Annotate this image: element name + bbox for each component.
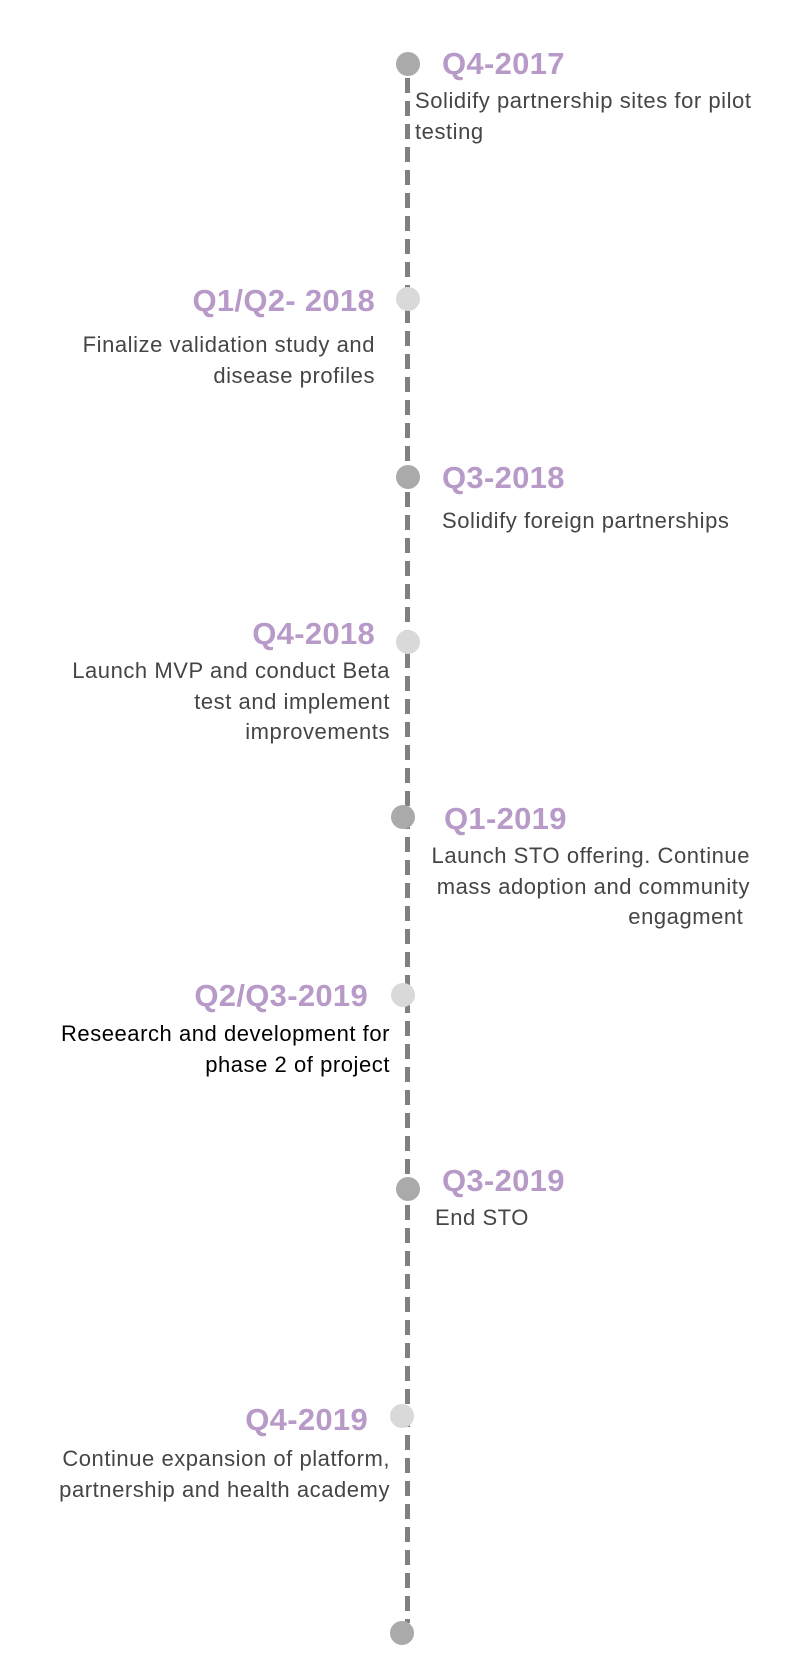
text: disease profiles bbox=[213, 362, 375, 388]
text: phase 2 of project bbox=[205, 1052, 390, 1076]
milestone: Q4-2017 bbox=[396, 46, 752, 144]
dot bbox=[391, 983, 415, 1007]
dot bbox=[396, 52, 420, 76]
heading: Q4-2018 bbox=[252, 616, 375, 651]
milestone: Q2/Q3-2019 bbox=[61, 978, 415, 1076]
milestone: Q3-2018 bbox=[396, 460, 729, 533]
text bbox=[415, 88, 752, 144]
dot bbox=[396, 287, 420, 311]
text: Launch STO offering. Continue bbox=[432, 843, 750, 868]
heading: Q4-2019 bbox=[245, 1402, 368, 1437]
dot bbox=[396, 630, 420, 654]
text bbox=[59, 1446, 390, 1502]
timeline line bbox=[405, 78, 410, 1623]
dot bbox=[396, 465, 420, 489]
text: test and implement bbox=[194, 688, 390, 714]
heading: Q3-2019 bbox=[442, 1163, 565, 1198]
text: Continue expansion of platform, bbox=[62, 1446, 390, 1471]
milestone: Q4-2018 bbox=[72, 616, 420, 744]
end dot bbox=[390, 1621, 414, 1645]
text: End STO bbox=[435, 1205, 529, 1230]
text bbox=[83, 332, 375, 388]
text: mass adoption and community bbox=[437, 874, 750, 898]
heading: Q3-2018 bbox=[442, 460, 565, 495]
heading: Q4-2017 bbox=[442, 46, 565, 81]
text: Launch MVP and conduct Beta bbox=[72, 658, 390, 683]
heading: Q2/Q3-2019 bbox=[194, 978, 368, 1013]
text bbox=[72, 658, 390, 744]
text: Reseearch and development for bbox=[61, 1021, 390, 1046]
text: Solidify partnership sites for pilot bbox=[415, 88, 752, 113]
text: testing bbox=[415, 118, 484, 144]
milestone: Q3-2019 bbox=[396, 1163, 565, 1230]
milestone: Q4-2019 bbox=[59, 1402, 414, 1502]
text: Solidify foreign partnerships bbox=[442, 508, 729, 533]
dot bbox=[391, 805, 415, 829]
milestone: Q1-2019 bbox=[391, 801, 750, 929]
heading: Q1-2019 bbox=[444, 801, 567, 836]
heading: Q1/Q2- 2018 bbox=[192, 283, 375, 318]
dot bbox=[390, 1404, 414, 1428]
text: engagment bbox=[628, 904, 743, 929]
milestone: Q1/Q2-2018 bbox=[83, 283, 420, 388]
text: Finalize validation study and bbox=[83, 332, 375, 357]
dot bbox=[396, 1177, 420, 1201]
text bbox=[432, 843, 750, 929]
text bbox=[61, 1021, 390, 1076]
text: improvements bbox=[245, 719, 390, 744]
text: partnership and health academy bbox=[59, 1476, 390, 1502]
